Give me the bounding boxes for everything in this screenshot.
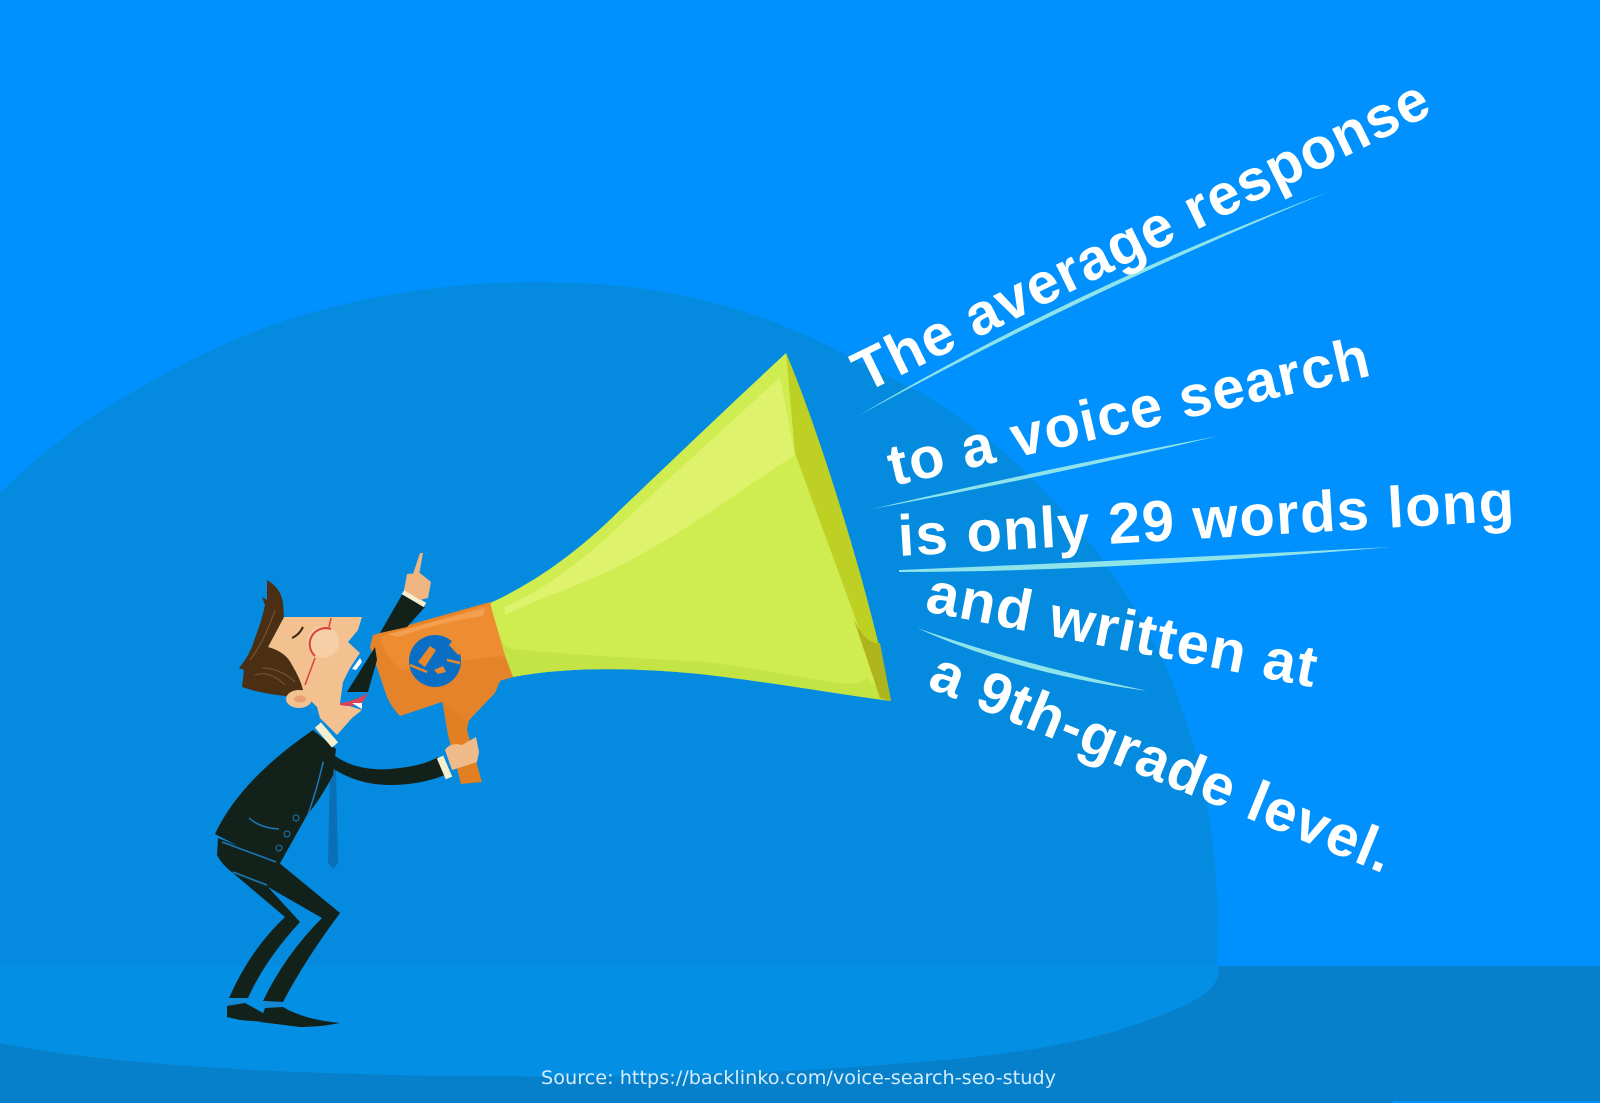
teeth (352, 658, 362, 709)
streak: line two (872, 436, 1218, 509)
eye (292, 627, 303, 638)
raised arm (347, 593, 425, 692)
jacket details (222, 755, 325, 885)
glasses (305, 618, 339, 685)
megaphone highlight strip (388, 608, 485, 637)
megaphone logo (409, 635, 462, 687)
back leg (229, 873, 300, 998)
text line five: a 9th-grade level. (921, 639, 1403, 886)
megaphone handle (442, 700, 482, 784)
text line one: The average response (842, 66, 1440, 405)
megaphone horn body (487, 353, 891, 701)
jacket (215, 730, 336, 867)
rim lower shadow (853, 617, 891, 701)
pointing finger (413, 553, 423, 575)
forward hand (445, 737, 479, 770)
hair (239, 580, 303, 697)
ear (286, 690, 312, 708)
streak: line one (858, 192, 1328, 416)
forward cuff (440, 757, 449, 778)
background dome (0, 282, 1218, 1077)
horn rim (786, 353, 891, 701)
head (268, 617, 362, 735)
horn highlight (505, 377, 795, 615)
megaphone (370, 353, 891, 784)
streak: line four (917, 628, 1148, 691)
raised cuff (403, 592, 425, 605)
bottom edge strip (1393, 1101, 1600, 1103)
jacket buttons (276, 815, 299, 851)
back shoe (227, 1003, 265, 1022)
forward arm (313, 745, 445, 785)
tie (328, 768, 338, 869)
horn lower shading (487, 607, 891, 701)
megaphone body (370, 602, 513, 722)
text line two: to a voice search (881, 325, 1375, 499)
front leg (217, 838, 340, 1002)
floor band (0, 966, 1600, 1103)
streak: line three (899, 547, 1391, 572)
megaphone body upper tone (380, 604, 505, 670)
front shoe (260, 1007, 340, 1027)
socks (228, 999, 282, 1008)
text line four: and written at (921, 560, 1323, 700)
man figure (215, 553, 479, 1027)
text line three: is only 29 words long (896, 469, 1516, 569)
source note: Source: https://backlinko.com/voice-search-seo-study (541, 1067, 1056, 1089)
tongue (340, 693, 368, 706)
collar (318, 725, 335, 745)
raised hand (404, 573, 431, 600)
